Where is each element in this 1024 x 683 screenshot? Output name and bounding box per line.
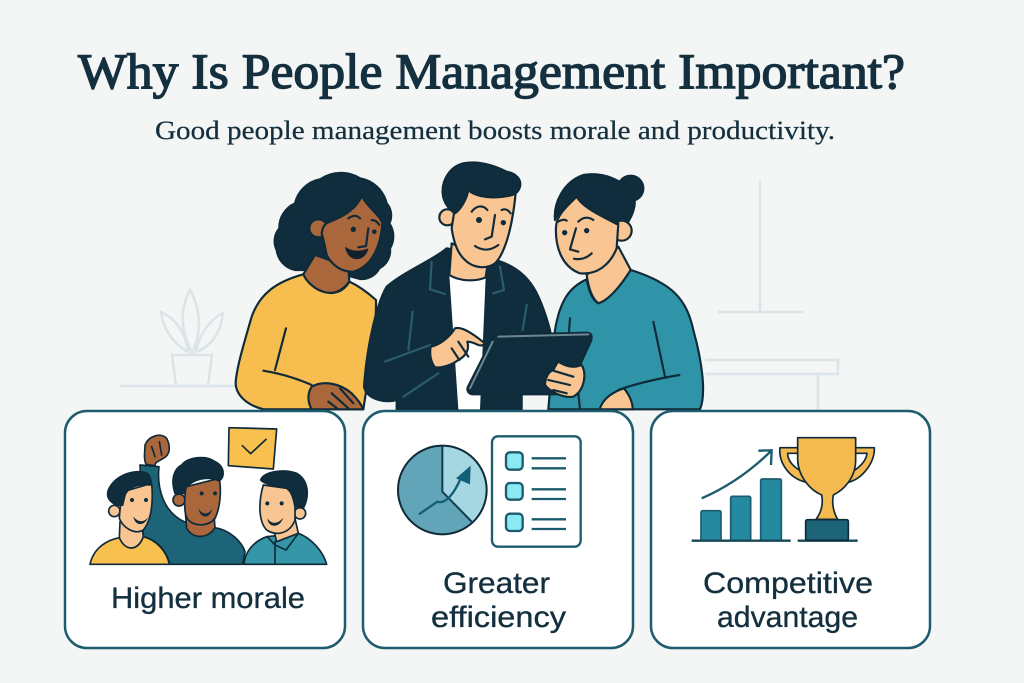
title: Why Is People Management Important? (78, 43, 905, 99)
subtitle: Good people management boosts morale and productivity. (155, 116, 835, 145)
man with jacket (364, 162, 555, 409)
card: higher morale (65, 411, 345, 648)
hand holding tablet (545, 362, 584, 397)
tablet (467, 333, 592, 394)
woman with curly hair (236, 173, 393, 409)
pointing hand (430, 328, 484, 368)
illustration: three colleagues around a tablet (236, 162, 703, 409)
icon: pie chart and checklist (398, 436, 581, 547)
icon: bar chart and trophy (692, 438, 874, 541)
card: competitive advantage (651, 411, 930, 648)
card: greater efficiency (363, 411, 633, 648)
icon: cheering team (90, 428, 327, 564)
label: Greater (443, 567, 550, 600)
label: Competitive (703, 567, 873, 600)
card: competitive advantage: advantage (717, 601, 858, 634)
label: Higher morale (111, 582, 305, 615)
card: greater efficiency: efficiency (431, 601, 566, 634)
woman with hair bun (548, 174, 703, 409)
